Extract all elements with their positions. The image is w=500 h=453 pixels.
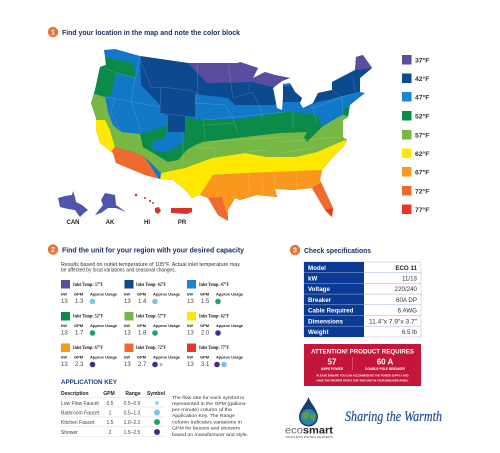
card 37F <box>61 280 118 305</box>
step 3 heading: 3 <box>293 248 297 254</box>
card 47F: kW <box>187 292 193 296</box>
flow rate explanation <box>172 395 248 438</box>
card 77F: kW <box>187 354 193 360</box>
card 42F: kW <box>124 292 130 296</box>
card 37F: 1.3 <box>75 299 84 305</box>
application key table: 1.0–2.2 <box>124 420 141 426</box>
specification table: ECO 11 <box>395 265 418 272</box>
inset: Alaska: AK <box>106 220 115 226</box>
card 72F: Inlet Temp: 72°F <box>136 344 166 351</box>
card 37F: Approx Usage <box>90 292 118 296</box>
application key table: 1.5–2.5 <box>124 430 141 436</box>
card 47F: 13 <box>187 299 194 305</box>
specification table: Breaker <box>308 297 332 304</box>
step 1 heading: Find your location in the map and note the color block <box>62 28 241 37</box>
card 67F: kW <box>61 354 67 360</box>
specification table: 11/13 <box>402 276 418 282</box>
step 3 heading: Check specifications <box>304 246 371 255</box>
inset: Hawaii: HI <box>144 220 150 226</box>
card 72F: Approx Usage <box>153 354 181 360</box>
specification table: Cable Required <box>308 308 354 314</box>
specification table: kW <box>308 276 317 282</box>
card 77F: 13 <box>187 362 194 368</box>
card 42F: 1.4 <box>138 299 147 305</box>
temperature legend: 37°F <box>415 56 429 64</box>
application key table: 0.5–0.9 <box>124 401 141 407</box>
card 52F: GPM <box>74 323 84 328</box>
card 62F: GPM <box>200 323 210 328</box>
results note: be affected by local variations and seasonal changes. <box>61 268 176 274</box>
flow rate explanation: The flow rate for each symbol is <box>172 395 245 401</box>
card 72F: 13 <box>124 362 131 368</box>
card 42F: Approx Usage <box>153 292 181 296</box>
card 57F: kW <box>124 323 130 328</box>
capacity grid by inlet temperature <box>61 280 244 368</box>
flow rate explanation: based on manufacturer and style. <box>172 432 248 438</box>
temperature legend: 47°F <box>415 94 429 102</box>
temperature legend: 42°F <box>415 75 429 83</box>
card 57F <box>124 312 181 336</box>
specification table: 6.5 lb <box>402 329 418 336</box>
ecosmart logo: TANKLESS WATER HEATERS <box>285 435 333 439</box>
ecosmart logo <box>285 397 334 439</box>
application key table: Range <box>125 391 141 397</box>
temperature legend: 57°F <box>415 132 429 140</box>
attention callout: 60 A <box>377 358 394 366</box>
temperature zone map of the United States <box>91 49 372 221</box>
results note: Results based on outlet temperature of 105°F. Actual inlet temperature may <box>61 262 241 268</box>
card 67F: Inlet Temp: 67°F <box>73 344 103 351</box>
icon: water drop globe <box>299 397 318 426</box>
application key table: GPM <box>103 391 115 397</box>
state boundary lines <box>105 56 360 195</box>
card 62F: 2.0 <box>201 330 210 336</box>
specification table: 220/240 <box>395 286 418 293</box>
flow rate explanation: Application Key. The Range <box>172 413 235 419</box>
attention callout: ATTENTION! PRODUCT REQUIRES <box>311 348 415 356</box>
card 37F: kW <box>61 292 67 296</box>
card 52F <box>61 312 118 336</box>
attention callout: AMPS POWER <box>321 367 344 371</box>
inset maps <box>58 191 192 226</box>
flow rate explanation: GPM for faucets and showers <box>172 426 241 432</box>
attention callout <box>304 344 421 386</box>
application key table: Low Flow Faucet <box>61 401 99 407</box>
specification table: 60A DP <box>396 297 417 304</box>
card 67F: Approx Usage <box>90 354 118 360</box>
card 62F <box>187 312 244 336</box>
card 57F: GPM <box>137 323 147 328</box>
card 52F: Inlet Temp: 52°F <box>73 312 103 320</box>
step 2 heading: 2 <box>51 247 55 254</box>
card 42F: Inlet Temp: 42°F <box>136 281 166 288</box>
application key table: Description <box>61 391 89 397</box>
card 37F: 13 <box>61 299 68 305</box>
temperature legend: 67°F <box>415 168 429 176</box>
attention callout: PLEASE ENSURE YOU CAN ACCOMMODATE THE POWER SUPPLY AND <box>316 374 409 378</box>
temperature legend <box>402 55 429 214</box>
card 57F: 13 <box>124 330 131 336</box>
card 52F: Approx Usage <box>90 323 118 328</box>
card 77F: Approx Usage <box>216 354 244 360</box>
temperature legend: 52°F <box>415 112 429 120</box>
card 57F: Inlet Temp: 57°F <box>136 312 166 320</box>
application key table: Bathroom Faucet <box>61 410 100 416</box>
application key table: 0.5–1.3 <box>124 410 141 416</box>
card 57F: 1.8 <box>138 330 147 336</box>
card 77F <box>187 344 244 368</box>
temperature legend: 62°F <box>415 150 429 158</box>
specification table: Model <box>308 265 326 272</box>
card 42F <box>124 280 181 305</box>
card 67F: 13 <box>61 362 68 368</box>
ecosmart logo: ecosmart <box>285 426 334 436</box>
specification table: Weight <box>308 329 329 336</box>
application key table: 2 <box>109 430 112 436</box>
application symbols <box>154 401 160 435</box>
card 37F: Inlet Temp: 37°F <box>73 281 103 288</box>
application key table: 0.5 <box>107 401 114 407</box>
temperature legend: 72°F <box>415 188 429 196</box>
card 62F: Approx Usage <box>216 323 244 328</box>
card 67F: GPM <box>74 354 84 360</box>
application key table: Kitchen Faucet <box>61 420 95 426</box>
card 77F: Inlet Temp: 77°F <box>199 344 229 351</box>
card 52F: 13 <box>61 330 68 336</box>
card 72F: kW <box>124 354 130 360</box>
step 3 heading <box>290 245 371 255</box>
card 67F <box>61 344 118 368</box>
card 72F <box>124 344 181 368</box>
application key table: 1 <box>109 410 112 416</box>
inset: Canada: CAN <box>66 220 80 226</box>
card 77F: 3.1 <box>201 362 210 368</box>
results note <box>61 262 241 274</box>
card 47F: GPM <box>200 292 210 296</box>
flow rate explanation: represented in the GPM (gallons- <box>172 401 247 407</box>
card 62F: Inlet Temp: 62°F <box>199 312 229 320</box>
card 62F: 13 <box>187 330 194 336</box>
specification table: 11.4"x 7.9"x 3.7" <box>369 318 417 326</box>
flow rate explanation: column indicates variations in <box>172 420 242 426</box>
attention callout: DOUBLE POLE BREAKER <box>365 367 406 371</box>
step 1 heading: 1 <box>51 30 55 36</box>
application key table: 1.5 <box>107 420 114 426</box>
card 52F: kW <box>61 323 67 328</box>
card 57F: Approx Usage <box>153 323 181 328</box>
card 52F: 1.7 <box>75 330 84 336</box>
tagline: Sharing the Warmth <box>345 409 442 425</box>
card 42F: 13 <box>124 299 131 305</box>
flow rate explanation: per-minute) column of the <box>172 407 232 413</box>
card 72F: 2.7 <box>138 362 147 368</box>
attention callout: HAVE THE PROPER SPOTS FOR THIS UNIT IN YOUR BREAKER PANEL <box>316 378 409 382</box>
card 47F: 1.5 <box>201 299 210 305</box>
card 72F: GPM <box>137 354 147 360</box>
application key table: Shower <box>61 430 78 436</box>
application key table: APPLICATION KEY <box>61 380 117 386</box>
card 42F: GPM <box>137 292 147 296</box>
specification table <box>304 262 421 337</box>
card 67F: 2.3 <box>75 362 84 368</box>
attention callout: 57 <box>328 358 337 366</box>
card 47F: Inlet Temp: 47°F <box>199 281 229 288</box>
card 47F <box>187 280 244 305</box>
card 37F: GPM <box>74 292 84 296</box>
application key table: Symbol <box>147 391 166 397</box>
card 47F: Approx Usage <box>216 292 244 296</box>
step 2 heading: Find the unit for your region with your desired capacity <box>62 246 245 254</box>
card 62F: kW <box>187 323 193 328</box>
temperature legend: 77°F <box>415 206 429 214</box>
card 77F: GPM <box>200 354 210 360</box>
specification table: Voltage <box>308 286 330 293</box>
specification table: Dimensions <box>308 318 344 326</box>
specification table: 6 AWG <box>398 308 417 314</box>
application key table <box>61 380 166 436</box>
inset: Puerto Rico: PR <box>178 220 187 226</box>
